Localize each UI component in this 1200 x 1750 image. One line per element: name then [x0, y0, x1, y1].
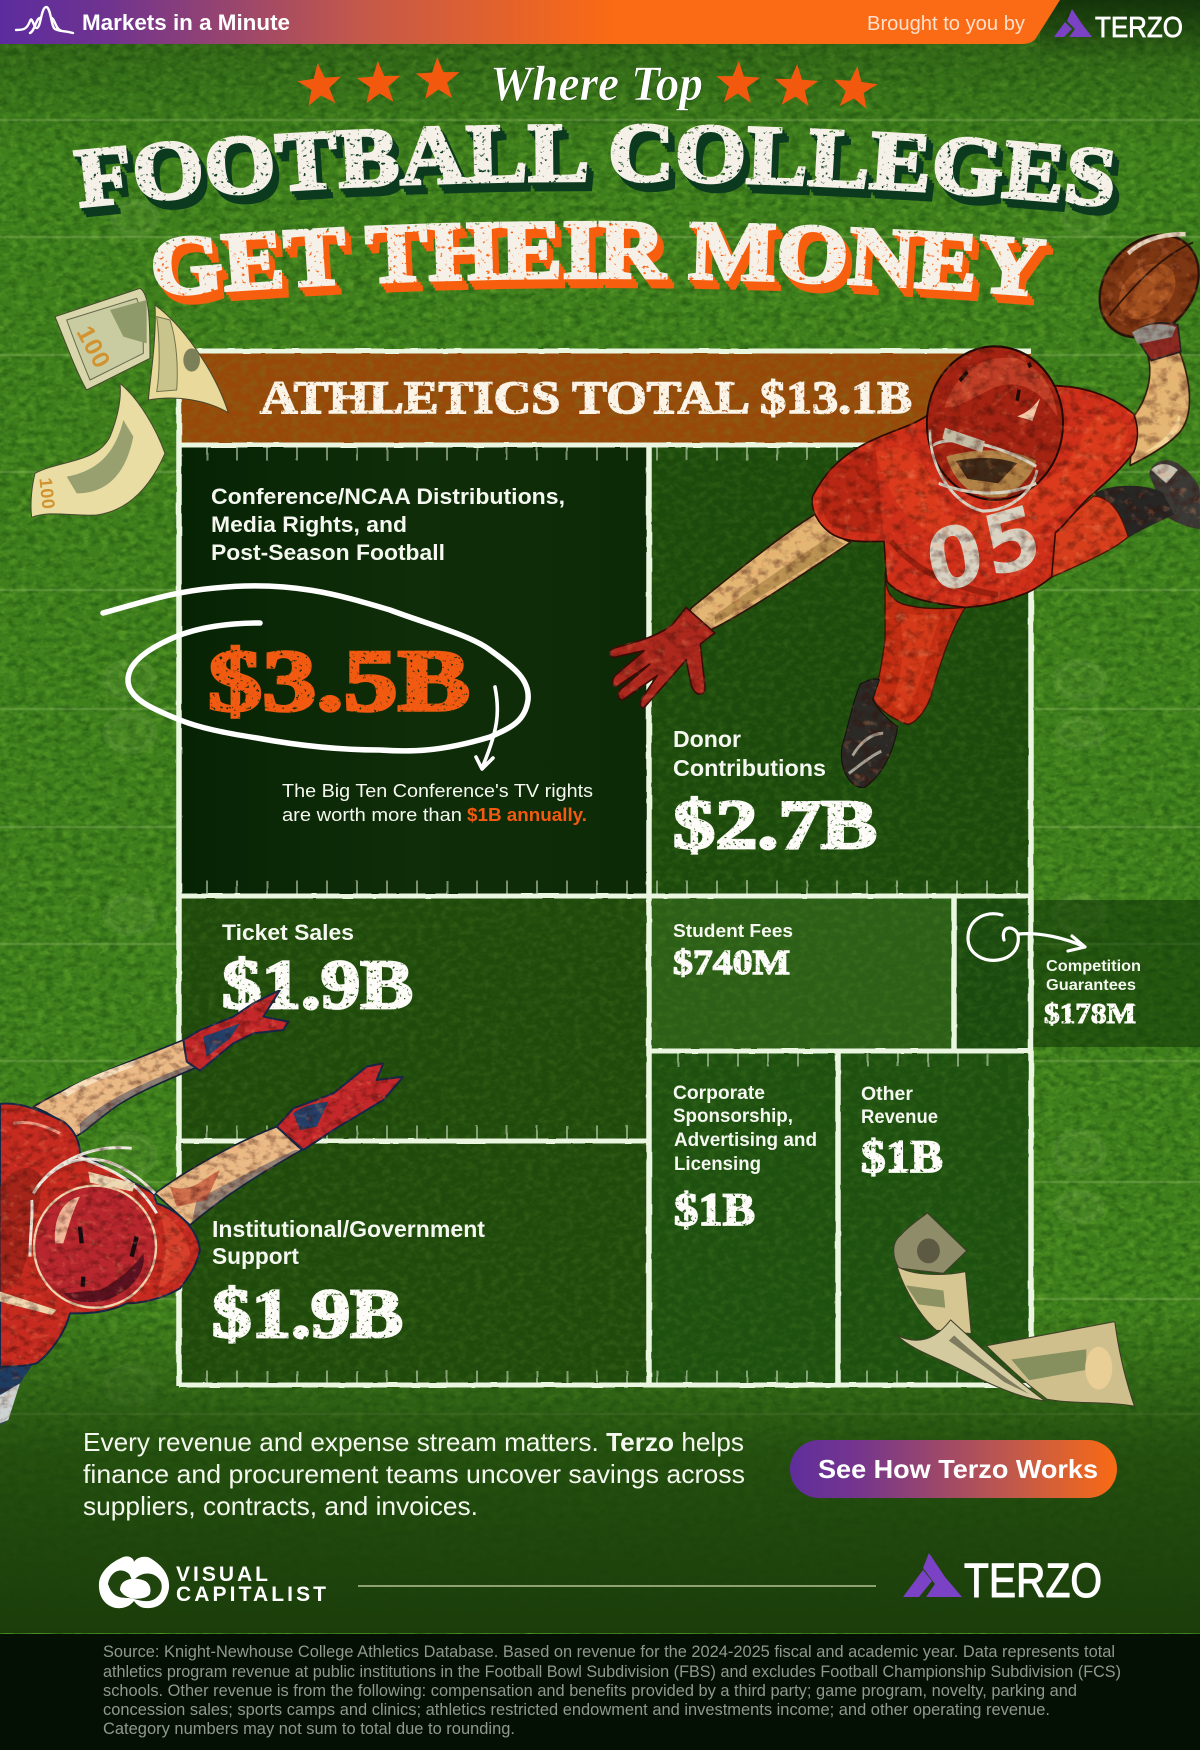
panel: corporate sponsorship: $1B: [674, 1184, 755, 1236]
panel: conference distributions: The Big Ten Conference's TV rights: [282, 780, 593, 801]
panel: athletics total banner: ATHLETICS TOTAL $13.1B: [260, 372, 912, 424]
header bar: [0, 0, 1200, 60]
panel: conference distributions: [180, 445, 649, 896]
logo: visual capitalist: CAPITALIST: [176, 1583, 326, 1606]
footer source notes: Source: Knight-Newhouse College Athletics Database. Based on revenue for the 2024-2025 fiscal and academic year. Data represents total: [103, 1643, 1115, 1661]
panel: other revenue: $1B: [861, 1131, 943, 1183]
helmet and facemask: [30, 1148, 157, 1308]
logo: terzo: TERZO: [964, 1555, 1102, 1608]
panel: student fees: Student Fees: [673, 920, 793, 941]
lower glove: [277, 1063, 403, 1150]
upper glove: [183, 990, 288, 1071]
helmet: [927, 346, 1063, 511]
title: football colleges: FOOTBALL COLLEGES: [72, 123, 1120, 218]
footer source notes: concession sales; sports camps and clinics; athletics restricted endowment and investments income; and other operating revenue.: [103, 1701, 1050, 1719]
title: get their money: GET THEIR MONEY: [153, 220, 1054, 306]
panel: student fees: $740M: [673, 943, 790, 982]
left leg: [841, 573, 965, 788]
panel: ticket sales: [180, 896, 649, 1141]
panel: institutional government support: [180, 1141, 649, 1386]
right arm: [1130, 323, 1189, 466]
panel: corporate sponsorship: [649, 1051, 838, 1386]
panel: conference distributions: Post-Season Football: [211, 540, 445, 565]
header bar: Markets in a Minute: [82, 10, 290, 35]
panel: donor contributions: $2.7B: [673, 787, 877, 864]
call to action line three: suppliers, contracts, and invoices.: [83, 1491, 478, 1521]
panel: corporate sponsorship: Sponsorship,: [673, 1106, 793, 1127]
shorts thigh: [1052, 496, 1128, 577]
title: where top: Where Top: [490, 55, 703, 111]
footer source notes: schools. Other revenue is from the following: compensation and benefits provided by a third party; game program, novelty, parking and: [103, 1682, 1077, 1700]
panel: corporate sponsorship: Corporate: [673, 1083, 765, 1104]
upper arm: [33, 1040, 197, 1137]
footer source notes: Category numbers may not sum to total due to rounding.: [103, 1720, 515, 1738]
footer source notes: athletics program revenue at public institutions in the Football Bowl Subdivision (FBS) and excludes Football Championship Subdivision (FCS): [103, 1663, 1121, 1681]
logo: visual capitalist: VISUAL: [176, 1563, 268, 1586]
panel: conference distributions: are worth more than: [282, 804, 462, 825]
header bar: Brought to you by: [867, 13, 1025, 35]
panel: other revenue: Revenue: [861, 1107, 938, 1128]
call to action text: Every revenue and expense stream matters. Terzo helps: [83, 1427, 744, 1457]
panel: corporate sponsorship: Licensing: [674, 1154, 761, 1175]
illustration: diving player with football top right: [610, 214, 1200, 788]
shoe and sock: [1094, 460, 1200, 539]
panel: competition guarantees: Competition: [1046, 958, 1141, 975]
panel: corporate sponsorship: Advertising and: [674, 1130, 817, 1151]
call to action line two: finance and procurement teams uncover savings across: [83, 1459, 745, 1489]
header bar: TERZO: [1095, 12, 1183, 44]
panel: donor contributions: Contributions: [673, 755, 826, 781]
curled bill: [148, 305, 228, 413]
annotation: hand drawn ellipse and arrow: [103, 586, 528, 769]
jersey: [812, 381, 1137, 614]
pants and shoe: [0, 1358, 37, 1425]
panel: institutional government support: Support: [212, 1243, 299, 1269]
panel: athletics total banner: [180, 352, 1031, 445]
title stars: [296, 56, 879, 110]
panel: conference distributions: Media Rights, and: [211, 512, 407, 537]
panel: competition guarantees: $178M: [1044, 998, 1136, 1030]
panel: competition guarantees: Guarantees: [1046, 977, 1136, 994]
annotation: competition circle and arrow: [968, 914, 1085, 960]
jersey number: 05: [918, 487, 1052, 614]
icon: terzo triangle small: [1054, 9, 1092, 37]
lower bill: 100: [35, 477, 59, 511]
panel: conference distributions: Conference/NCAA Distributions,: [211, 484, 565, 509]
logo: terzo: [903, 1553, 1102, 1608]
button: See How Terzo Works: [818, 1454, 1098, 1484]
illustration: reaching player bottom left: [0, 990, 403, 1425]
lower arm: [155, 1127, 302, 1225]
logo: visual capitalist: [99, 1556, 326, 1608]
bill with 100: 100: [71, 322, 115, 373]
panel: competition guarantees: [954, 896, 1200, 1051]
left arm: [690, 512, 851, 630]
illustration: money bills top left: [31, 288, 228, 517]
panel: donor contributions: Donor: [673, 726, 741, 752]
panel: institutional government support: Institutional/Government: [212, 1216, 485, 1242]
panel: conference distributions: $3.5B: [208, 633, 470, 730]
lower bill: [31, 383, 165, 517]
torso: [0, 1104, 200, 1367]
panel: conference distributions: $1B annually.: [467, 804, 587, 825]
panel: ticket sales: $1.9B: [222, 947, 413, 1024]
icon: markets wave logo: [16, 7, 73, 33]
panel: other revenue: Other: [861, 1084, 914, 1105]
panel: ticket sales: Ticket Sales: [222, 920, 354, 945]
button: [790, 1440, 1117, 1498]
panel: institutional government support: $1.9B: [212, 1276, 403, 1353]
panel: donor contributions: [649, 445, 1031, 896]
glove: [610, 607, 715, 708]
bill with 100: [55, 288, 150, 390]
panel: student fees: [649, 896, 954, 1051]
footer source notes: [0, 1634, 1200, 1750]
panel: other revenue: [838, 1051, 1031, 1386]
football: [1083, 214, 1200, 358]
illustration: money bills bottom right: [894, 1213, 1134, 1406]
